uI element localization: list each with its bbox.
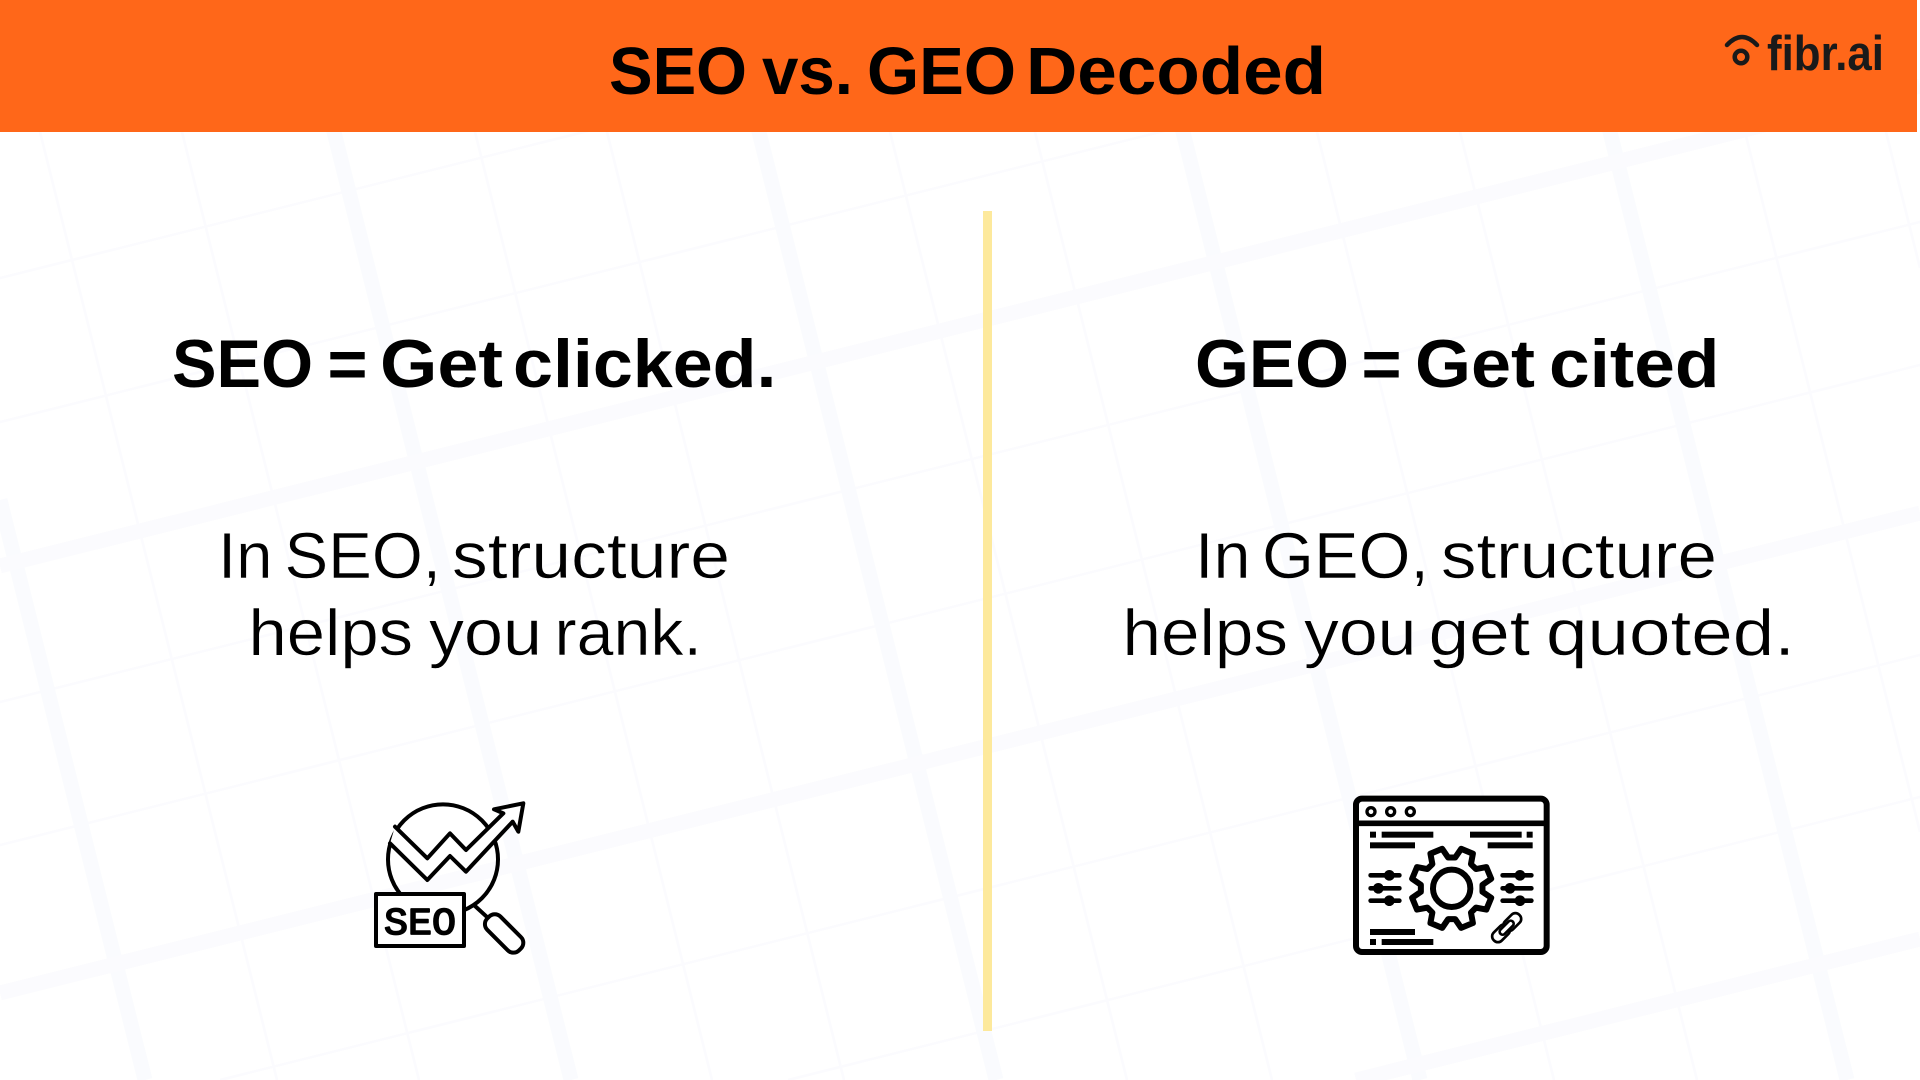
center divider bbox=[983, 211, 992, 1031]
text: GEO description bbox=[1122, 519, 1795, 669]
text: SEO description: helps bbox=[248, 596, 413, 669]
heading: GEO = Get cited bbox=[1195, 326, 1720, 402]
text: SEO description: In bbox=[218, 519, 272, 592]
heading: GEO = Get cited: GEO bbox=[1195, 326, 1349, 402]
text: GEO description: In bbox=[1195, 519, 1250, 592]
text: SEO description: structure bbox=[452, 519, 730, 592]
text: GEO description: quoted. bbox=[1546, 596, 1795, 669]
title: vs. bbox=[762, 34, 853, 109]
panel: GEO bbox=[1122, 326, 1795, 955]
header banner bbox=[0, 0, 1917, 132]
icon: SEO magnifier with growth arrow: SEO bbox=[384, 903, 456, 946]
text: SEO description: you bbox=[429, 596, 542, 669]
text: SEO description: SEO, bbox=[284, 519, 441, 592]
icon: browser window with gear and link bbox=[1353, 796, 1550, 955]
heading: GEO = Get cited: = bbox=[1362, 326, 1402, 402]
text: GEO description: structure bbox=[1441, 519, 1717, 592]
title: Decoded bbox=[1026, 34, 1326, 109]
heading: SEO = Get clicked.: Get bbox=[380, 326, 503, 402]
icon: SEO magnifier with growth arrow bbox=[374, 801, 526, 955]
heading: SEO = Get clicked.: clicked. bbox=[513, 326, 776, 402]
heading: GEO = Get cited: cited bbox=[1549, 326, 1720, 402]
title: SEO bbox=[609, 34, 747, 109]
text: SEO description bbox=[218, 519, 730, 669]
heading: SEO = Get clicked.: = bbox=[328, 326, 368, 402]
panel: SEO bbox=[172, 326, 776, 955]
heading: GEO = Get cited: Get bbox=[1415, 326, 1535, 402]
heading: SEO = Get clicked.: SEO bbox=[172, 326, 313, 402]
text: GEO description: get bbox=[1428, 596, 1530, 669]
text: SEO description: rank. bbox=[554, 596, 702, 669]
title bbox=[609, 34, 1326, 109]
heading: SEO = Get clicked. bbox=[172, 326, 776, 402]
text: GEO description: helps bbox=[1122, 596, 1288, 669]
text: GEO description: GEO, bbox=[1262, 519, 1429, 592]
title: GEO bbox=[867, 34, 1016, 109]
logo: fibr.ai: fibr.ai bbox=[1767, 27, 1884, 81]
logo: fibr.ai bbox=[1724, 27, 1884, 81]
text: GEO description: you bbox=[1304, 596, 1416, 669]
